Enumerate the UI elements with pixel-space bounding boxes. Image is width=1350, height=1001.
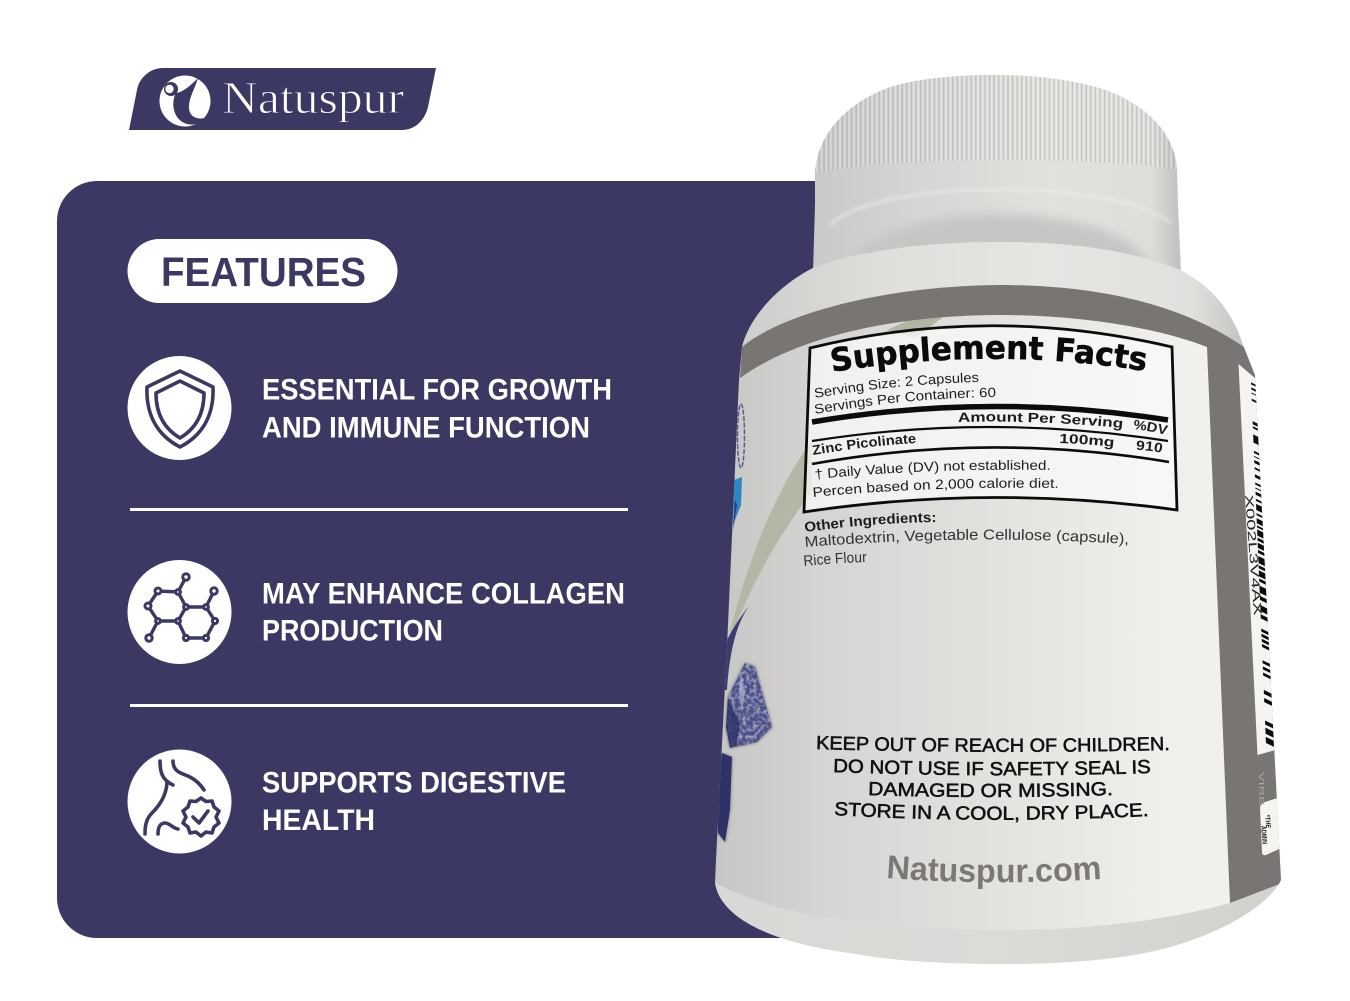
feature text: digestive <box>262 766 566 837</box>
barcode sticker <box>1238 364 1274 755</box>
barcode number: X002L3V4AX <box>1245 495 1262 616</box>
website: Natuspur.com <box>888 856 1100 889</box>
serving details: Serving Size: 2 Capsules <box>814 372 978 398</box>
feature text: immune: ESSENTIAL FOR GROWTH <box>262 374 612 406</box>
feature: immune function <box>128 356 612 460</box>
other ingredients <box>804 513 1128 566</box>
feature text: collagen: MAY ENHANCE COLLAGEN <box>262 578 625 610</box>
grey label band <box>740 285 1290 903</box>
feature: digestive <box>128 750 566 854</box>
icon: shield <box>128 356 232 460</box>
nutrition rows: 100mg <box>1060 434 1114 450</box>
supplement facts panel <box>802 324 1178 514</box>
feature text: immune <box>262 374 612 444</box>
serving details: Servings Per Container: 60 <box>815 388 996 414</box>
small side sticker: VIRE <box>1257 772 1265 806</box>
product: supplement bottle <box>715 74 1281 964</box>
side logo fragments <box>733 404 744 530</box>
warning text: KEEP OUT OF REACH OF CHILDREN. <box>817 736 1168 752</box>
other ingredients: Maltodextrin, Vegetable Cellulose (capsule), <box>806 528 1128 547</box>
swoosh: olive <box>729 440 812 636</box>
footnotes <box>813 460 1058 497</box>
warning text <box>817 736 1168 822</box>
feature text: digestive: SUPPORTS DIGESTIVE <box>262 766 566 800</box>
feature text: immune: AND IMMUNE FUNCTION <box>262 412 590 444</box>
nutrition rows: Amount Per Serving <box>958 412 1122 430</box>
feature text: digestive: HEALTH <box>262 804 375 837</box>
icon: natuspur logo mark <box>160 76 210 126</box>
warning text: DAMAGED OR MISSING. <box>869 782 1112 798</box>
other ingredients: Other Ingredients: <box>804 513 936 532</box>
nutrition rows: 910 <box>1136 440 1162 452</box>
warning text: DO NOT USE IF SAFETY SEAL IS <box>834 758 1150 776</box>
feature: collagen <box>128 560 625 664</box>
footnotes: Percen based on 2,000 calorie diet. <box>813 478 1058 497</box>
feature text: collagen: PRODUCTION <box>262 614 443 648</box>
panel: features background <box>57 181 830 938</box>
rock: upper <box>726 663 772 748</box>
barcode <box>1255 384 1270 746</box>
small side sticker <box>1259 772 1280 856</box>
logo wordmark: Natuspur <box>222 72 404 123</box>
nutrition rows <box>812 412 1168 455</box>
logo badge <box>129 68 436 130</box>
heading pill: features <box>128 239 398 303</box>
nutrition rows: Zinc Picolinate <box>812 434 916 455</box>
bottle cap <box>813 75 1181 272</box>
heading pill: features: FEATURES <box>161 249 366 295</box>
footnotes: † Daily Value (DV) not established. <box>815 460 1050 480</box>
bottom rim <box>715 880 1281 964</box>
rock: lower <box>718 753 732 842</box>
icon: molecule <box>128 560 232 664</box>
feature text: collagen <box>262 578 625 648</box>
warning text: STORE IN A COOL, DRY PLACE. <box>834 802 1148 822</box>
serving details <box>814 372 996 414</box>
small side sticker: *THE <box>1263 815 1272 829</box>
icon: stomach with badge <box>128 750 232 854</box>
title: supplement facts: Supplement Facts <box>831 336 1146 372</box>
nutrition rows: %DV <box>1134 420 1168 434</box>
bottle body <box>715 242 1281 964</box>
other ingredients: Rice Flour <box>804 552 866 566</box>
small side sticker: ADMIN <box>1259 826 1268 845</box>
swoosh: navy <box>724 606 749 690</box>
